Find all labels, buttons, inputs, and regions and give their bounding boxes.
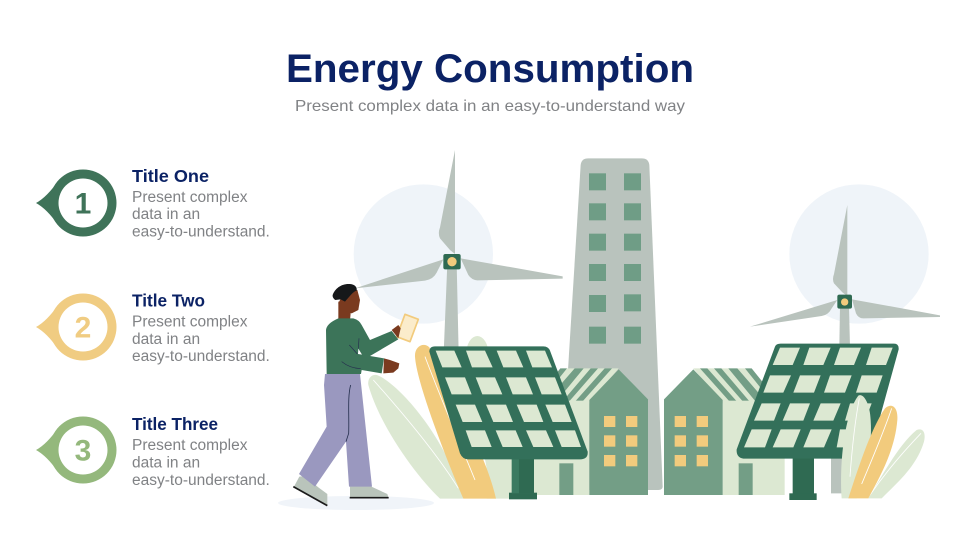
ground shadow <box>278 496 434 510</box>
title: Energy Consumption <box>286 47 694 91</box>
left house <box>527 368 648 495</box>
right house <box>664 368 785 495</box>
item 1 text: Present complex <box>132 189 248 206</box>
left wind turbine <box>354 150 563 353</box>
item 1 heading: Title One <box>132 166 209 186</box>
badge 3 <box>36 416 116 484</box>
subtitle: Present complex data in an easy-to-understand way <box>295 98 685 115</box>
item 3 text: easy-to-understand. <box>132 472 270 489</box>
list item 1 <box>36 166 270 240</box>
badge 1: 1 <box>75 188 91 220</box>
list item 2 <box>36 290 270 365</box>
badge 1 <box>36 170 116 236</box>
person: trousers <box>299 374 372 487</box>
item 2 text: Present complex <box>132 314 248 330</box>
right plants <box>841 395 925 498</box>
person: neck and head <box>333 284 360 321</box>
item 3 text: Present complex <box>132 437 248 454</box>
badge 2: 2 <box>75 312 91 344</box>
illustration: renewable energy scene <box>278 150 940 510</box>
list item 3 <box>36 414 270 489</box>
badge 3: 3 <box>75 434 91 468</box>
person with tablet <box>293 284 418 506</box>
left solar panel <box>429 346 588 499</box>
item 1 text: easy-to-understand. <box>132 224 270 240</box>
item 3 text: data in an <box>132 454 200 472</box>
person: sweater <box>326 318 398 374</box>
badge 2 <box>36 294 116 360</box>
item 2 heading: Title Two <box>132 290 205 310</box>
person: hands and tablet <box>383 314 418 373</box>
right solar panel <box>737 344 899 500</box>
right wind turbine <box>750 184 940 493</box>
left plants behind panel <box>368 336 513 499</box>
item 2 text: easy-to-understand. <box>132 348 270 365</box>
person: shoes <box>293 476 389 506</box>
item 2 text: data in an <box>132 331 200 348</box>
item 3 heading: Title Three <box>132 414 218 434</box>
office tower <box>568 158 663 490</box>
item 1 text: data in an <box>132 206 200 223</box>
